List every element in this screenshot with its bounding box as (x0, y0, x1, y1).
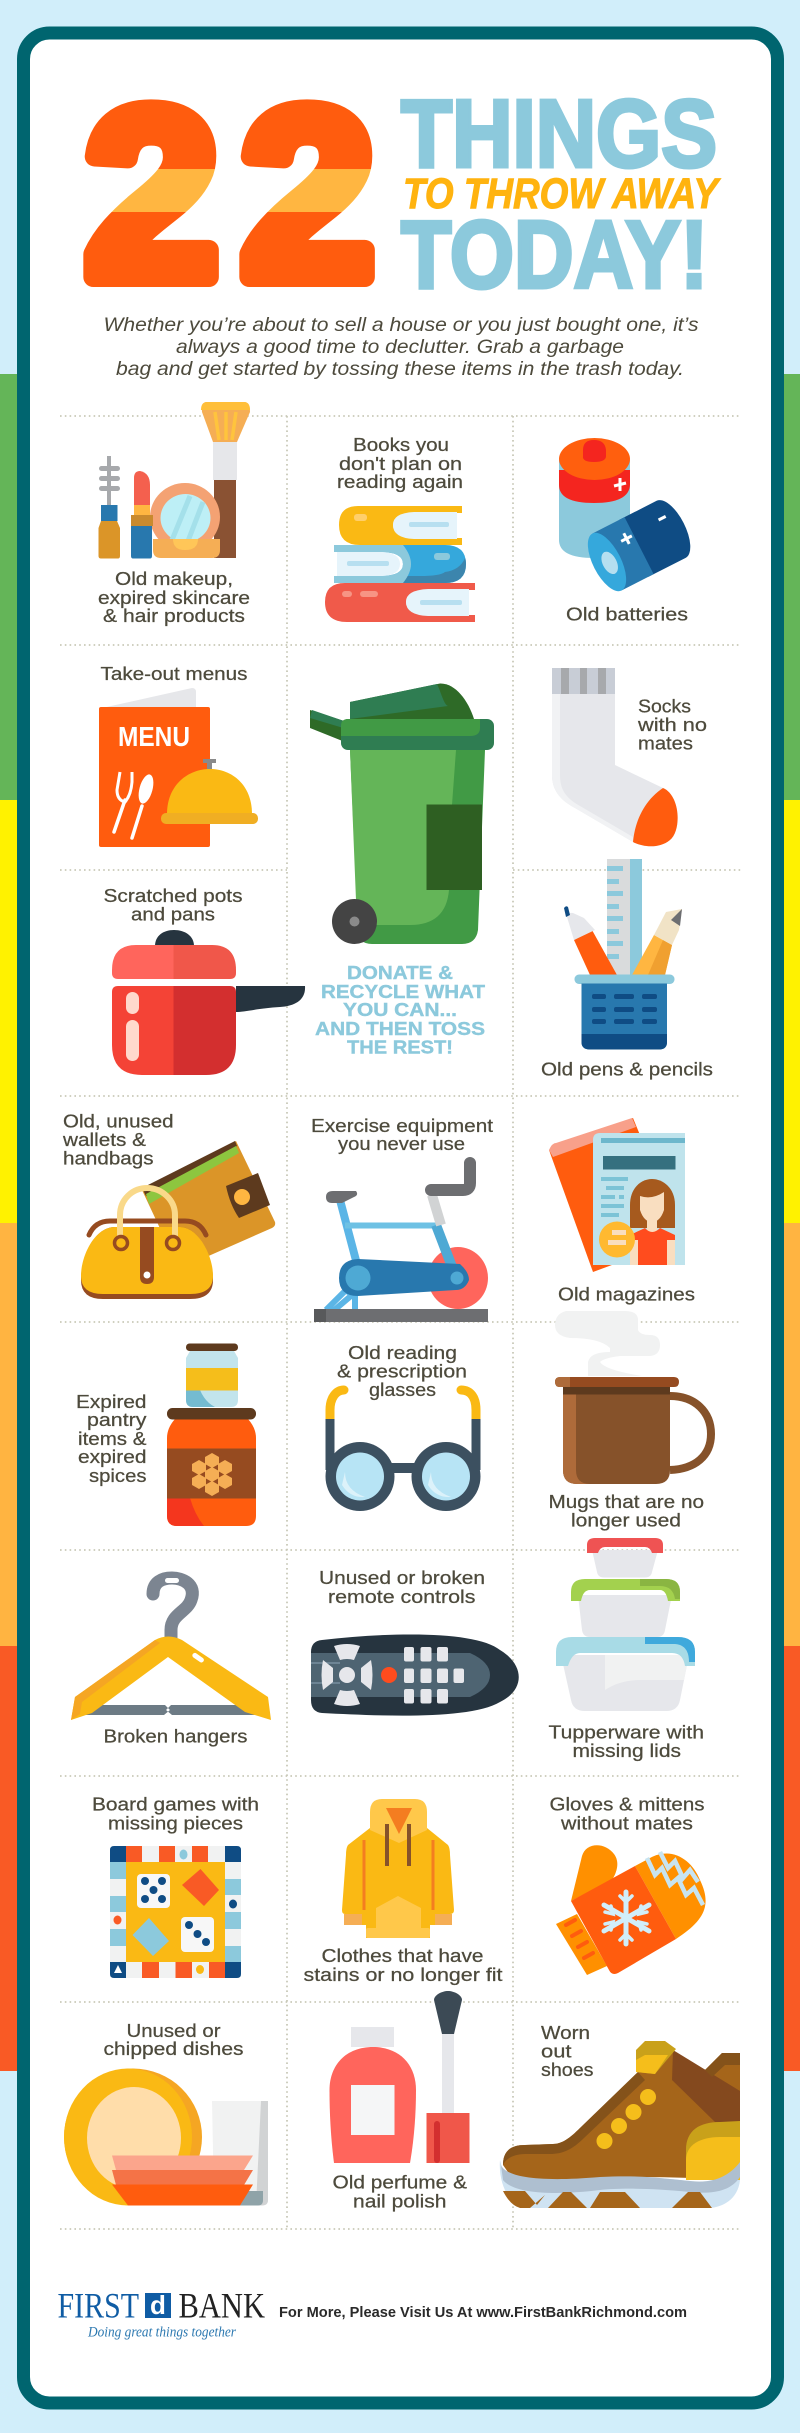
panel: dishes (64, 2020, 268, 2206)
logo: First Bank: d (150, 2290, 166, 2320)
panel: magazines (549, 1118, 695, 1305)
label (332, 2172, 468, 2212)
label (637, 696, 707, 754)
panel: batteries (559, 438, 698, 624)
icon: garbage bin (310, 683, 494, 944)
panel: hangers (71, 1578, 271, 1747)
icon: mug (555, 1311, 711, 1484)
panel: perfume and nail polish (330, 1991, 470, 2212)
label: don't plan on (339, 453, 462, 474)
panel: makeup (98, 402, 250, 626)
footer (58, 2286, 687, 2340)
label: remote controls (328, 1586, 476, 1607)
panel: tupperware (548, 1538, 704, 1761)
label: nail polish (353, 2190, 446, 2212)
icon: pen holder (564, 859, 682, 1050)
panel: gloves and mittens (550, 1794, 706, 1975)
icon: pot (112, 930, 305, 1075)
label: wallets & (62, 1129, 147, 1150)
icon: books (325, 506, 475, 622)
icon: sock (552, 668, 678, 846)
icon: glasses (326, 1390, 480, 1511)
title (85, 60, 721, 328)
panel: socks (552, 668, 707, 846)
label: Old batteries (566, 604, 688, 624)
label (337, 434, 463, 492)
message text: THE REST! (347, 1036, 453, 1058)
panel: clothes (304, 1799, 502, 1985)
label: Old reading (348, 1342, 457, 1363)
label: stains or no longer fit (304, 1964, 502, 1985)
label: out (541, 2040, 572, 2062)
TO THROW AWAY: TO THROW AWAY (403, 170, 721, 218)
label: chipped dishes (104, 2038, 244, 2059)
label: Take-out menus (100, 663, 248, 684)
label: expired skincare (98, 587, 250, 608)
label: Old makeup, (115, 568, 233, 589)
panel: board games (92, 1794, 259, 1978)
label: Old magazines (558, 1284, 695, 1305)
label: without mates (560, 1812, 693, 1834)
label (319, 1567, 485, 1607)
label (550, 1794, 704, 1834)
label: missing lids (572, 1740, 681, 1761)
label: Exercise equipment (311, 1115, 493, 1136)
label: Unused or broken (319, 1567, 485, 1588)
label: spices (89, 1465, 146, 1486)
icon: batteries (559, 438, 698, 597)
label (541, 2022, 594, 2080)
label: Tupperware with (548, 1722, 704, 1742)
label: Socks (638, 696, 691, 716)
label: & hair products (103, 605, 245, 626)
label: Expired (76, 1391, 146, 1412)
logo: First Bank: Doing great things together (87, 2324, 236, 2340)
label: pantry (87, 1409, 147, 1430)
message text (315, 962, 486, 1058)
label: Board games with (92, 1794, 259, 1814)
icon: jars (167, 1344, 256, 1526)
label: and pans (131, 904, 215, 924)
label: you never use (338, 1133, 465, 1154)
label: items & (78, 1428, 147, 1449)
label: Old pens & pencils (541, 1058, 713, 1080)
logo: First Bank: FIRST (58, 2286, 139, 2326)
icon: perfume and polish (330, 1991, 470, 2163)
logo: First Bank (58, 2286, 265, 2340)
panel: shoes (500, 2022, 740, 2208)
label (104, 885, 242, 924)
panel: exercise equipment (311, 1115, 493, 1322)
label (304, 1945, 502, 1985)
panel: mugs (548, 1311, 711, 1530)
website text: For More, Please Visit Us At www.FirstBankRichmond.com (279, 2305, 687, 2321)
label (92, 1794, 259, 1834)
label: missing pieces (108, 1812, 243, 1834)
label: Books you (353, 434, 449, 455)
panel: wallets and handbags (62, 1110, 275, 1299)
icon: board game (110, 1846, 241, 1978)
icon: mitten (556, 1845, 706, 1975)
panel: remote controls (311, 1567, 519, 1716)
TODAY!: TODAY! (401, 202, 708, 308)
message text: RECYCLE WHAT (321, 981, 486, 1002)
panel: take-out menus (99, 663, 258, 847)
panel: glasses (326, 1342, 480, 1511)
panel: pens and pencils (541, 859, 713, 1080)
icon: hanger (71, 1578, 271, 1720)
icon: remote (311, 1634, 519, 1716)
label: Worn (541, 2022, 590, 2043)
label: Scratched pots (104, 885, 242, 906)
label: expired (78, 1446, 146, 1467)
label (311, 1115, 493, 1154)
number 22: 22 (85, 60, 374, 328)
THINGS: THINGS (401, 80, 717, 188)
intro paragraph: bag and get started by tossing these items in the trash today. (116, 359, 684, 380)
label: reading again (337, 471, 463, 492)
intro paragraph: Whether you’re about to sell a house or you just bought one, it’s (104, 315, 699, 336)
icon: makeup (98, 402, 250, 558)
label (62, 1110, 174, 1168)
label: longer used (571, 1510, 681, 1530)
icon: menu and cloche: MENU (118, 721, 190, 752)
label: shoes (541, 2059, 594, 2080)
logo: First Bank: BANK (178, 2286, 265, 2326)
label (548, 1722, 704, 1761)
label: glasses (369, 1379, 436, 1400)
label: Unused or (126, 2020, 220, 2041)
panel: pantry items (76, 1344, 256, 1526)
icon: dishes (64, 2068, 268, 2206)
intro paragraph (104, 315, 699, 380)
label (337, 1342, 467, 1400)
icon: menu and cloche (99, 688, 258, 847)
label: handbags (63, 1148, 154, 1168)
intro paragraph: always a good time to declutter. Grab a garbage (176, 337, 624, 358)
label: Old perfume & (332, 2172, 468, 2192)
label: with no (637, 714, 707, 735)
label: Old, unused (63, 1110, 174, 1132)
label: mates (638, 732, 693, 754)
panel: pots and pans (104, 885, 305, 1075)
icon: magazines (549, 1118, 685, 1272)
panel: books (325, 434, 475, 622)
message text: YOU CAN... (343, 999, 457, 1020)
icon: wallet and bag (81, 1141, 275, 1299)
icon: exercise bike (314, 1163, 488, 1322)
message text: AND THEN TOSS (315, 1018, 485, 1039)
label: Mugs that are no (548, 1491, 704, 1512)
label (98, 568, 250, 626)
label: Broken hangers (104, 1726, 248, 1747)
panel: garbage bin and message (310, 683, 494, 1058)
message text: DONATE & (347, 962, 453, 983)
icon: boot (500, 2041, 740, 2208)
icon: stacked containers (556, 1538, 695, 1711)
label: & prescription (337, 1360, 467, 1382)
icon: hoodie (342, 1799, 454, 1938)
label (76, 1391, 147, 1486)
label: Gloves & mittens (550, 1794, 704, 1814)
label (548, 1491, 704, 1530)
label (104, 2020, 244, 2059)
label: Clothes that have (322, 1945, 484, 1966)
